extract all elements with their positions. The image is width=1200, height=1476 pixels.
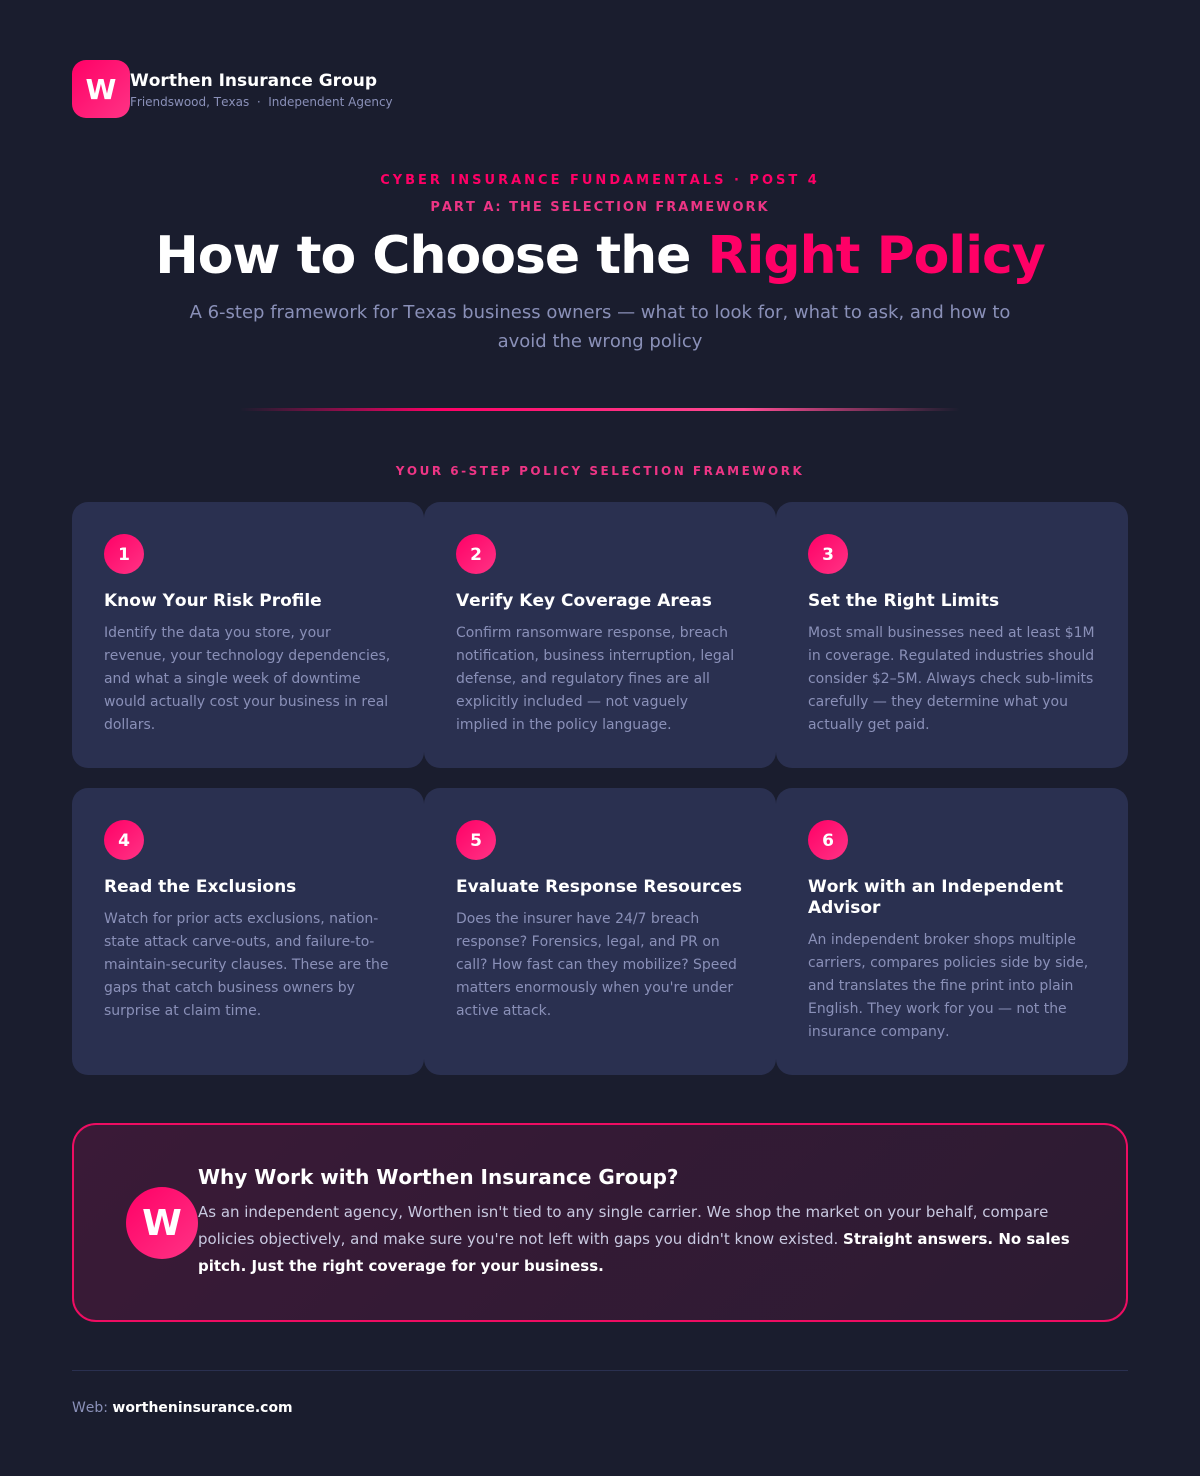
step 3 title: Set the Right Limits: [808, 591, 999, 611]
step 4 description: gaps that catch business owners by: [104, 980, 355, 996]
subtitle: A 6-step framework for Texas business owners — what to look for, what to ask, and how to: [190, 302, 1010, 323]
step 5 description: [456, 911, 737, 1019]
step 2 title: Verify Key Coverage Areas: [456, 591, 712, 611]
callout heading: Why Work with Worthen Insurance Group?: [198, 1165, 679, 1189]
step 1 description: dollars.: [104, 717, 155, 733]
subtitle: avoid the wrong policy: [498, 331, 702, 352]
section heading: YOUR 6-STEP POLICY SELECTION FRAMEWORK: [396, 464, 804, 478]
step 2 description: explicitly included — not vaguely: [456, 694, 688, 710]
step 2 description: notification, business interruption, legal: [456, 648, 734, 664]
panel: step 5: [424, 788, 776, 1075]
callout body text: As an independent agency, Worthen isn't tied to any single carrier. We shop the market on your behalf, compare: [198, 1203, 1048, 1221]
step number 3: 3: [822, 545, 834, 565]
icon: W badge: [126, 1187, 198, 1259]
step 4 description: surprise at claim time.: [104, 1003, 261, 1019]
step 6 title: [808, 877, 1063, 918]
step 4 description: [104, 911, 388, 1019]
step 6 title: Advisor: [808, 898, 880, 918]
panel: step 2: [424, 502, 776, 768]
panel: step 3: [776, 502, 1128, 768]
step number 5: 5: [470, 831, 482, 851]
step 6 description: An independent broker shops multiple: [808, 932, 1076, 948]
step 3 description: consider $2–5M. Always check sub-limits: [808, 671, 1093, 687]
step 2 description: Confirm ransomware response, breach: [456, 625, 728, 641]
step 6 description: insurance company.: [808, 1024, 950, 1040]
step 1 description: revenue, your technology dependencies,: [104, 648, 390, 664]
step number 6: 6: [822, 831, 834, 851]
step 4 title: Read the Exclusions: [104, 877, 296, 897]
step 4 description: state attack carve-outs, and failure-to-: [104, 934, 374, 950]
step 5 description: response? Forensics, legal, and PR on: [456, 934, 720, 950]
step 3 description: actually get paid.: [808, 717, 930, 733]
agency location: Friendswood, Texas · Independent Agency: [130, 95, 393, 109]
icon: W logo: [72, 60, 130, 118]
step number 6: [808, 820, 848, 860]
step number 5: [456, 820, 496, 860]
panel: step 4: [72, 788, 424, 1075]
step 5 title: Evaluate Response Resources: [456, 877, 742, 897]
step 6 description: and translates the fine print into plain: [808, 978, 1073, 994]
step 1 description: Identify the data you store, your: [104, 625, 331, 641]
subtitle: [190, 302, 1010, 352]
step number 3: [808, 534, 848, 574]
step 1 description: would actually cost your business in real: [104, 694, 388, 710]
step 3 description: in coverage. Regulated industries should: [808, 648, 1094, 664]
step number 1: [104, 534, 144, 574]
step 1 description: and what a single week of downtime: [104, 671, 361, 687]
step 3 description: [808, 625, 1095, 733]
step 3 description: carefully — they determine what you: [808, 694, 1068, 710]
step number 2: 2: [470, 545, 482, 565]
step 5 description: Does the insurer have 24/7 breach: [456, 911, 699, 927]
step 2 description: defense, and regulatory fines are all: [456, 671, 710, 687]
step 1 title: Know Your Risk Profile: [104, 591, 322, 611]
step 5 description: active attack.: [456, 1003, 551, 1019]
icon: W logo: W: [86, 73, 116, 106]
step 2 description: [456, 625, 734, 733]
step number 1: 1: [118, 545, 130, 565]
icon: W badge: W: [142, 1203, 182, 1244]
header: agency brand: [72, 60, 393, 118]
step 6 description: English. They work for you — not the: [808, 1001, 1067, 1017]
callout body text: policies objectively, and make sure you're not left with gaps you didn't know existed. Straight answers. No sales: [198, 1230, 1070, 1248]
step 2 description: implied in the policy language.: [456, 717, 672, 733]
footer rule: [72, 1370, 1128, 1371]
callout body text: [198, 1203, 1070, 1275]
step 3 description: Most small businesses need at least $1M: [808, 625, 1095, 641]
step number 2: [456, 534, 496, 574]
step number 4: [104, 820, 144, 860]
step 4 description: maintain-security clauses. These are the: [104, 957, 388, 973]
title: How to Choose the Right Policy: [155, 226, 1045, 286]
step number 4: 4: [118, 831, 130, 851]
step 5 description: call? How fast can they mobilize? Speed: [456, 957, 737, 973]
step 1 description: [104, 625, 390, 733]
panel: step 1: [72, 502, 424, 768]
step 6 title: Work with an Independent: [808, 877, 1063, 897]
eyebrow: part label: PART A: THE SELECTION FRAMEWORK: [430, 200, 770, 215]
callout body text: pitch. Just the right coverage for your business.: [198, 1257, 604, 1275]
divider: [240, 408, 960, 411]
panel: why work with Worthen callout: [72, 1123, 1128, 1322]
step 6 description: carriers, compares policies side by side,: [808, 955, 1088, 971]
panel: step 6: [776, 788, 1128, 1075]
step 5 description: matters enormously when you're under: [456, 980, 733, 996]
step 4 description: Watch for prior acts exclusions, nation-: [104, 911, 378, 927]
eyebrow: series label: CYBER INSURANCE FUNDAMENTALS · POST 4: [380, 173, 820, 188]
agency name: Worthen Insurance Group: [130, 71, 377, 91]
step 6 description: [808, 932, 1088, 1040]
footer: website: Web: wortheninsurance.com: [72, 1400, 293, 1416]
